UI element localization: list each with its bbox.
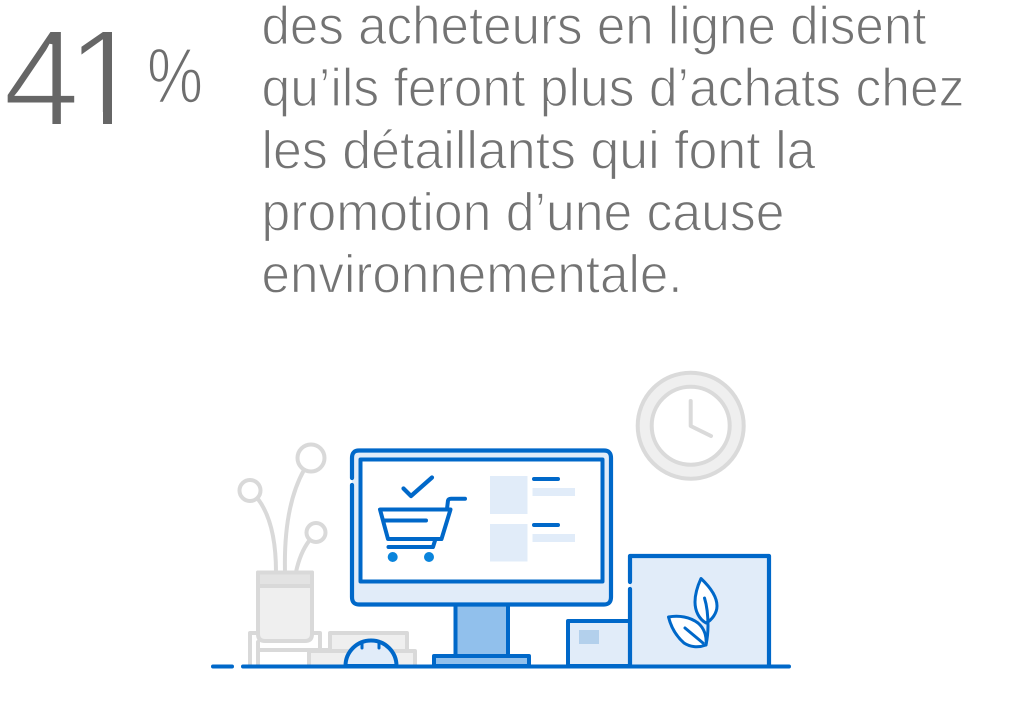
small cardboard box bbox=[568, 621, 630, 666]
big number 41: 4 bbox=[3, 2, 80, 156]
monitor screen bbox=[360, 460, 602, 582]
statement text: les détaillants qui font la bbox=[262, 120, 816, 180]
statement text: qu’ils feront plus d’achats chez bbox=[262, 58, 964, 118]
large box with leaf logo bbox=[630, 556, 769, 666]
chair frame behind pot bbox=[250, 633, 330, 665]
product list bbox=[490, 476, 575, 562]
big number 41: 1 bbox=[67, 2, 143, 156]
stacked books bbox=[309, 633, 415, 665]
statement text: promotion d’une cause bbox=[262, 182, 784, 242]
wall clock bbox=[638, 373, 744, 479]
monitor base bbox=[434, 656, 529, 666]
statement text bbox=[262, 0, 964, 304]
illustration: online shopping desk bbox=[213, 373, 789, 666]
desk line bbox=[213, 664, 789, 668]
plant pot with stems bbox=[240, 444, 330, 665]
shopping cart bbox=[380, 499, 465, 562]
icon: leaves bbox=[668, 578, 717, 647]
desk mouse bbox=[346, 640, 396, 666]
monitor stand bbox=[456, 604, 508, 656]
statement text: environnementale. bbox=[262, 244, 682, 304]
monitor body bbox=[352, 450, 611, 604]
check mark bbox=[404, 478, 432, 496]
monitor bbox=[352, 450, 611, 666]
big number 41 bbox=[8, 32, 112, 124]
percent sign: % bbox=[147, 32, 203, 120]
